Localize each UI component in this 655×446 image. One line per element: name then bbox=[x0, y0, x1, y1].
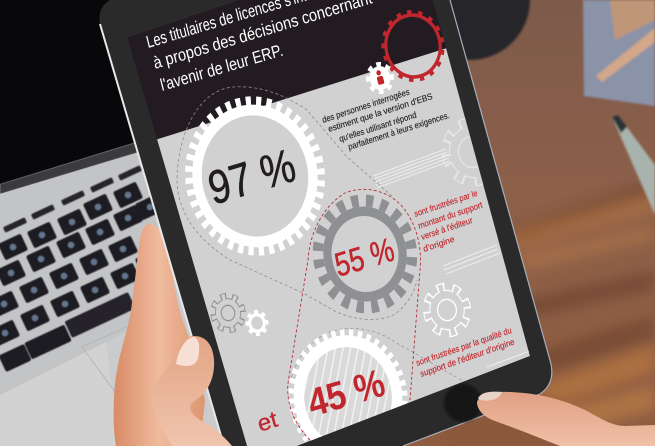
tablet screen bbox=[127, 0, 530, 446]
decorative stripes bbox=[373, 149, 530, 367]
white small gear bbox=[245, 309, 269, 337]
laptop bbox=[0, 0, 225, 446]
text: 97 % description: parfaitement à leurs exigences. bbox=[347, 110, 451, 152]
right finger nail bbox=[478, 392, 502, 401]
thumb nail bbox=[176, 337, 199, 366]
value: 55 %: 55 % bbox=[331, 231, 398, 284]
left index finger bbox=[114, 223, 205, 446]
text: 97 % description: qu'elles utilisant répond bbox=[338, 110, 418, 144]
red dashed belt bbox=[288, 189, 420, 440]
text: 55 % description: sont frustrées par le bbox=[413, 187, 479, 219]
laptop base right of finger bbox=[100, 150, 225, 446]
gear: 97 % bbox=[185, 96, 325, 256]
text: 55 % description: versé à l'éditeur bbox=[420, 214, 474, 242]
icon: person bbox=[376, 70, 384, 85]
value: 97 %: 97 % bbox=[203, 140, 301, 215]
gear: 55 % bbox=[312, 194, 418, 314]
dark round object behind tablet bbox=[410, 0, 530, 60]
white outline gear, lower right bbox=[422, 282, 472, 338]
pen bbox=[612, 115, 655, 215]
dashed arch above 45 gear bbox=[290, 328, 470, 385]
text: 55 % description: d'origine bbox=[422, 233, 456, 254]
home button bbox=[444, 384, 482, 422]
tablet silver rim, left bbox=[100, 24, 224, 446]
laptop screen bbox=[0, 0, 140, 184]
white gear with person icon bbox=[366, 62, 394, 94]
text: 97 % description: estiment que la version d'EBS bbox=[327, 91, 434, 134]
text: 55 % description bbox=[414, 190, 483, 252]
red gear outline bbox=[381, 10, 444, 82]
connector word: et: et bbox=[255, 406, 281, 437]
keyboard keys bbox=[0, 165, 165, 372]
gear: 45 % bbox=[288, 329, 408, 442]
tablet body bbox=[99, 0, 552, 446]
text: 45 % description: support de l'éditeur d'origine bbox=[419, 336, 516, 379]
grey outline gear, small bbox=[209, 292, 247, 334]
left thumb bbox=[152, 336, 232, 446]
text: 97 % description bbox=[321, 86, 451, 152]
black header band bbox=[127, 0, 447, 140]
text: 45 % description: sont frustrées par la qualité du bbox=[415, 324, 513, 368]
screen grey background bbox=[127, 0, 530, 446]
heading: l'avenir de leur ERP. bbox=[158, 41, 285, 95]
dashed belt around 97 and 55 gears bbox=[177, 87, 417, 319]
background gear, top right bbox=[442, 118, 484, 186]
text: 55 % description: montant du support bbox=[417, 199, 484, 231]
blue box with wooden sticks bbox=[583, 0, 655, 106]
right finger bbox=[477, 392, 655, 446]
text: 97 % description: des personnes interrogées bbox=[321, 86, 411, 125]
value: 45 %: 45 % bbox=[303, 361, 389, 425]
tablet rim, right bbox=[403, 0, 552, 446]
